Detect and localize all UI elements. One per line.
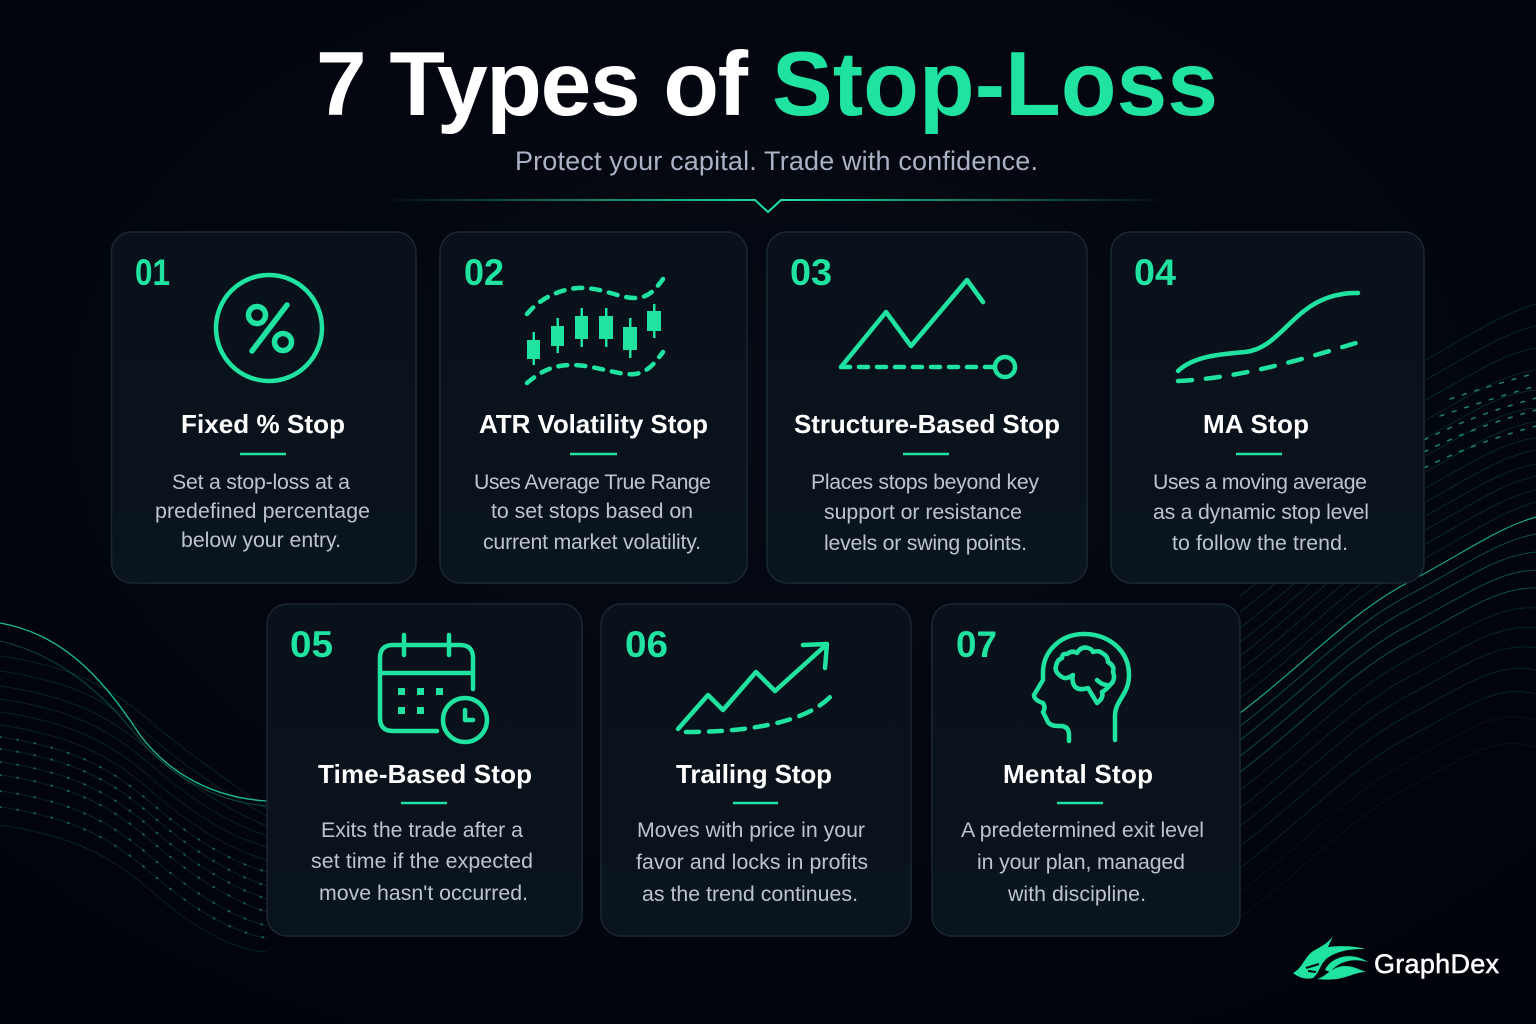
number 04: 04 — [1134, 252, 1176, 293]
description: Moves with price in your — [637, 818, 865, 842]
panel: 04 MA Stop — [1111, 232, 1424, 583]
description: move hasn't occurred. — [319, 881, 528, 905]
logo: GraphDex — [1293, 936, 1500, 980]
number 05: 05 — [290, 624, 333, 665]
description: to follow the trend. — [1172, 531, 1348, 555]
number 03: 03 — [790, 252, 832, 293]
left wave pattern — [0, 623, 267, 952]
description: below your entry. — [181, 528, 341, 552]
description: current market volatility. — [483, 530, 701, 554]
icon: head with brain — [1034, 634, 1129, 741]
icon: percent circle — [216, 275, 322, 381]
heading: MA Stop — [1203, 409, 1309, 439]
number 01: 01 — [135, 252, 170, 293]
description: A predetermined exit level — [961, 818, 1204, 842]
description — [311, 818, 533, 905]
description: Exits the trade after a — [321, 818, 523, 842]
number 06: 06 — [625, 624, 668, 665]
heading: Mental Stop — [1003, 759, 1153, 789]
description: to set stops based on — [491, 499, 693, 523]
title divider with notch — [380, 200, 1170, 212]
heading: Trailing Stop — [676, 759, 832, 789]
description — [811, 470, 1039, 555]
description: predefined percentage — [155, 499, 370, 523]
icon: logo mark — [1293, 936, 1368, 980]
description — [1153, 470, 1369, 555]
description: Uses Average True Range — [474, 470, 711, 494]
panel: 06 Trailing Stop — [601, 604, 911, 936]
icon: moving average lines — [1178, 293, 1358, 381]
description — [636, 818, 868, 906]
heading: ATR Volatility Stop — [479, 409, 708, 439]
right wave pattern — [1240, 304, 1536, 918]
description: as a dynamic stop level — [1153, 500, 1369, 524]
heading: Structure-Based Stop — [794, 409, 1060, 439]
panel: 05 Time-Based Stop — [267, 604, 582, 936]
description: favor and locks in profits — [636, 850, 868, 874]
icon: price structure with stop — [841, 280, 1015, 377]
panel: 03 Structure-Based Stop — [767, 232, 1087, 583]
wordmark: GraphDex — [1374, 949, 1500, 979]
description: set time if the expected — [311, 849, 533, 873]
subtitle: Protect your capital. Trade with confidence. — [515, 146, 1038, 176]
description: Set a stop-loss at a — [172, 470, 350, 494]
description: Places stops beyond key — [811, 470, 1039, 494]
description: levels or swing points. — [824, 531, 1027, 555]
title: Stop-Loss — [772, 34, 1218, 135]
icon: trailing trend arrow — [678, 644, 832, 732]
description: support or resistance — [824, 500, 1022, 524]
description: in your plan, managed — [977, 850, 1185, 874]
description: with discipline. — [1007, 882, 1146, 906]
description: Uses a moving average — [1153, 470, 1367, 494]
description — [961, 818, 1204, 906]
title: 7 Types of — [316, 34, 749, 135]
description — [474, 470, 711, 554]
panel: 07 Mental Stop — [932, 604, 1240, 936]
description — [155, 470, 370, 552]
icon: calendar with clock — [380, 635, 487, 742]
panel: 01 Fixed % Stop — [112, 232, 416, 583]
heading: Time-Based Stop — [318, 759, 532, 789]
title — [316, 34, 1218, 135]
icon: candlesticks with bands — [527, 279, 663, 383]
number 07: 07 — [956, 624, 997, 665]
number 02: 02 — [464, 252, 504, 293]
panel: 02 ATR Volatility Stop — [440, 232, 747, 583]
description: as the trend continues. — [642, 882, 858, 906]
heading: Fixed % Stop — [181, 409, 345, 439]
